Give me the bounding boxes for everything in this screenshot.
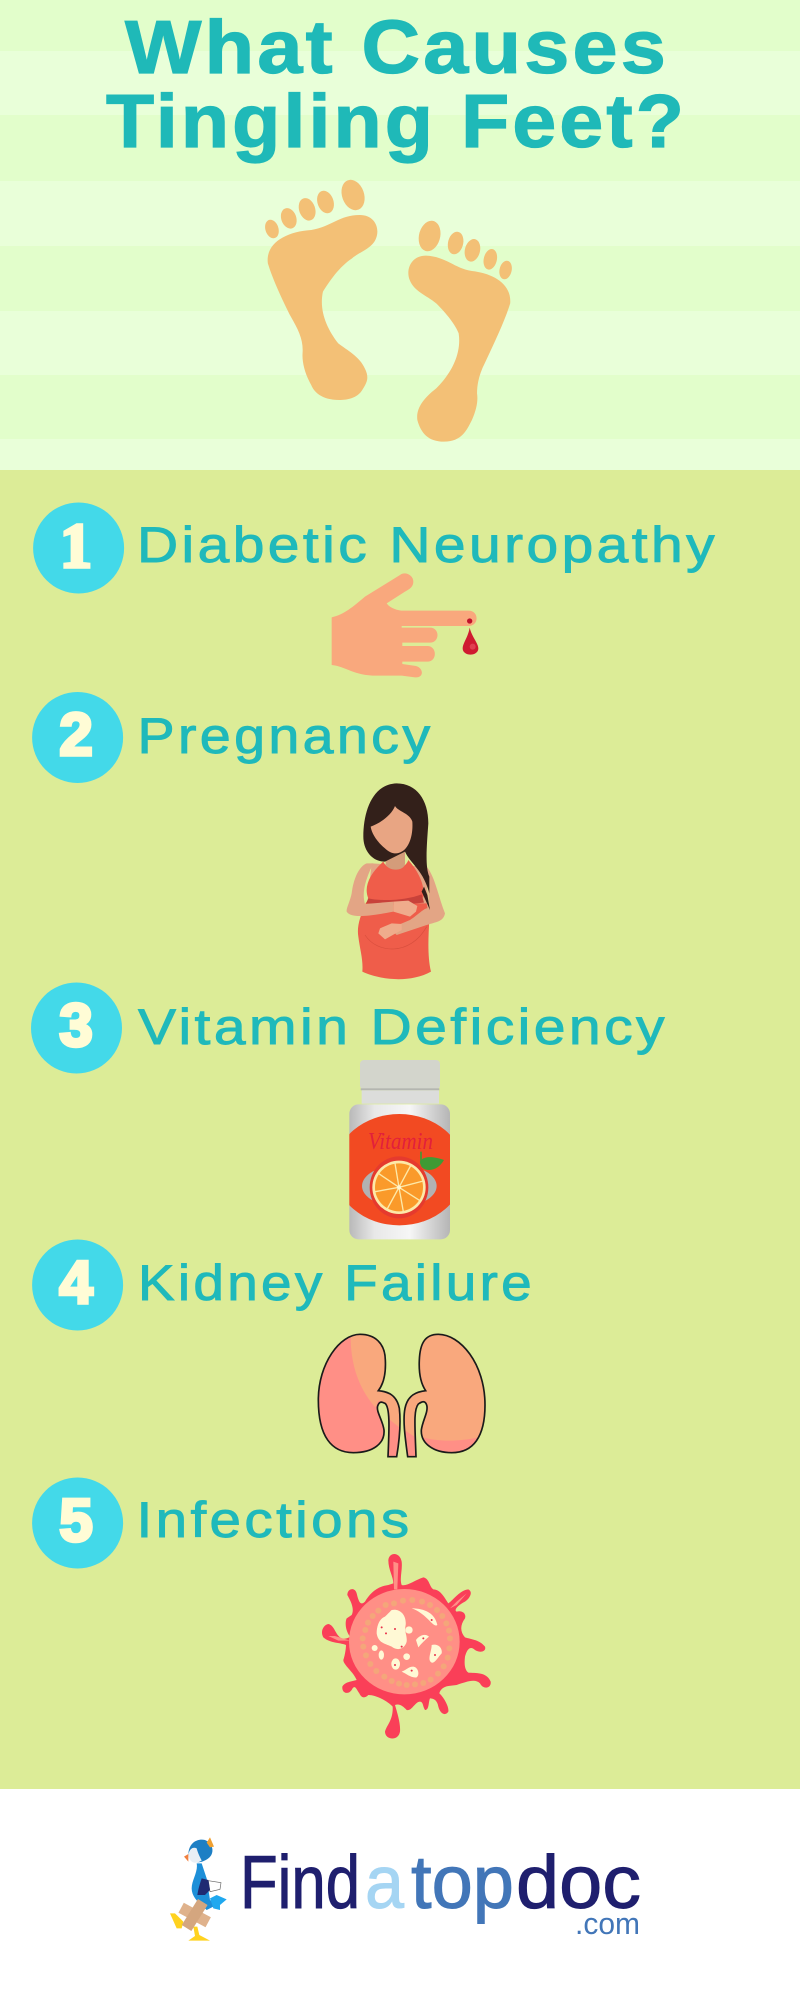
item 2: pregnancy <box>32 692 445 979</box>
heading: kidney failure: Kidney Failure <box>138 1255 535 1311</box>
number badge 5: 5 <box>59 1487 93 1554</box>
icon: finger with blood drop <box>332 573 478 677</box>
icon: vitamin bottle: Vitamin <box>368 1129 433 1155</box>
icon: vitamin bottle <box>349 1060 450 1240</box>
logo: findatopdoc wordmark: Find <box>240 1840 360 1924</box>
logo: findatopdoc wordmark <box>240 1840 641 1941</box>
panel: header background <box>0 0 800 470</box>
icon: kidneys <box>318 1334 485 1457</box>
heading: pregnancy: Pregnancy <box>138 708 434 764</box>
item 5: infections <box>32 1478 491 1739</box>
number badge 4: 4 <box>59 1249 93 1316</box>
logo: findatopdoc wordmark: a <box>365 1840 404 1924</box>
logo: findatopdoc wordmark: top <box>411 1840 514 1924</box>
logo: findatopdoc wordmark: .com <box>575 1906 640 1941</box>
number badge 2: 2 <box>59 701 93 768</box>
title: What Causes <box>125 5 669 89</box>
heading: vitamin deficiency: Vitamin Deficiency <box>138 999 668 1055</box>
icon: feet <box>263 179 513 442</box>
number badge 4 <box>32 1240 123 1330</box>
logo: findatopdoc mascot <box>170 1837 227 1941</box>
number badge 5 <box>32 1478 123 1568</box>
right kidney <box>404 1334 485 1457</box>
item 4: kidney failure <box>32 1240 535 1457</box>
icon: infected cell <box>322 1554 491 1739</box>
title <box>106 5 687 163</box>
number badge 3 <box>31 982 122 1074</box>
right foot <box>408 220 513 442</box>
left foot <box>263 179 377 400</box>
item 3: vitamin deficiency <box>31 982 668 1239</box>
panel: footer background <box>0 1789 800 2000</box>
heading: diabetic neuropathy: Diabetic Neuropathy <box>137 517 718 573</box>
number badge 1: 1 <box>60 510 92 581</box>
title: Tingling Feet? <box>106 79 687 163</box>
heading: infections: Infections <box>136 1492 412 1548</box>
number badge 2 <box>32 692 123 783</box>
icon: pregnant woman <box>347 783 445 979</box>
panel: causes background <box>0 470 800 1789</box>
left kidney <box>318 1334 400 1457</box>
item 1: diabetic neuropathy <box>33 502 718 677</box>
number badge 1 <box>33 502 124 594</box>
logo: findatopdoc wordmark: doc <box>516 1840 641 1924</box>
number badge 3: 3 <box>59 992 93 1059</box>
